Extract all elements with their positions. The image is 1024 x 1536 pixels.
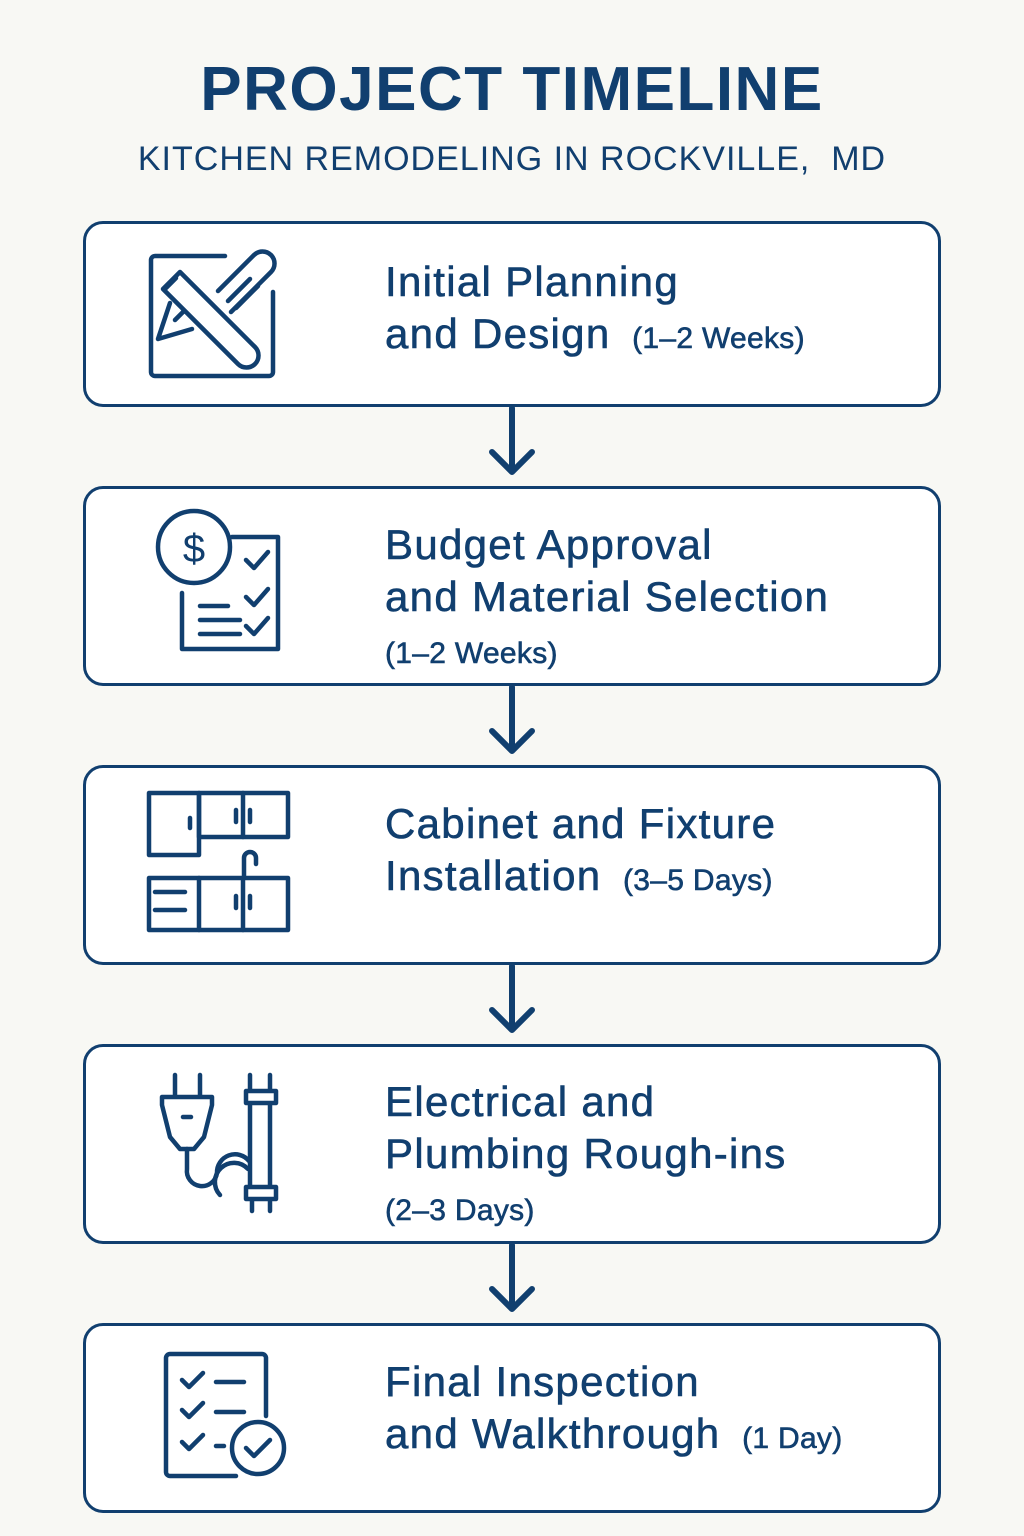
text: final: and Walkthrough (1 Day) xyxy=(385,1410,843,1457)
text: electrical: Electrical and xyxy=(385,1078,655,1125)
icon: plug and pipe xyxy=(162,1075,276,1211)
icon: cabinets xyxy=(149,793,288,930)
panel: cabinet xyxy=(83,765,941,965)
panel: electrical xyxy=(83,1044,941,1244)
text: planning: Initial Planning xyxy=(385,258,679,305)
text: budget: (1–2 Weeks) xyxy=(385,637,558,670)
text: budget: and Material Selection xyxy=(385,573,829,620)
panel: budget xyxy=(83,486,941,686)
icon: design pencil xyxy=(151,251,275,376)
panel: planning xyxy=(83,221,941,407)
text: budget: Budget Approval xyxy=(385,521,713,568)
text: final: Final Inspection xyxy=(385,1358,700,1405)
panel: final xyxy=(83,1323,941,1513)
text: cabinet: Installation (3–5 Days) xyxy=(385,852,773,899)
text: planning xyxy=(385,258,805,357)
subtitle: KITCHEN REMODELING IN ROCKVILLE, MD xyxy=(138,140,886,178)
text: electrical: (2–3 Days) xyxy=(385,1194,535,1227)
text: budget xyxy=(385,521,829,670)
icon: budget xyxy=(158,511,278,649)
title: PROJECT TIMELINE xyxy=(200,55,824,124)
icon: budget: $ xyxy=(183,527,205,571)
text: electrical xyxy=(385,1078,787,1227)
arrows xyxy=(492,408,532,1309)
text: cabinet xyxy=(385,800,776,899)
text: planning: and Design (1–2 Weeks) xyxy=(385,310,805,357)
text: final xyxy=(385,1358,843,1457)
text: electrical: Plumbing Rough-ins xyxy=(385,1130,787,1177)
icon: checklist xyxy=(166,1354,284,1476)
text: cabinet: Cabinet and Fixture xyxy=(385,800,776,847)
